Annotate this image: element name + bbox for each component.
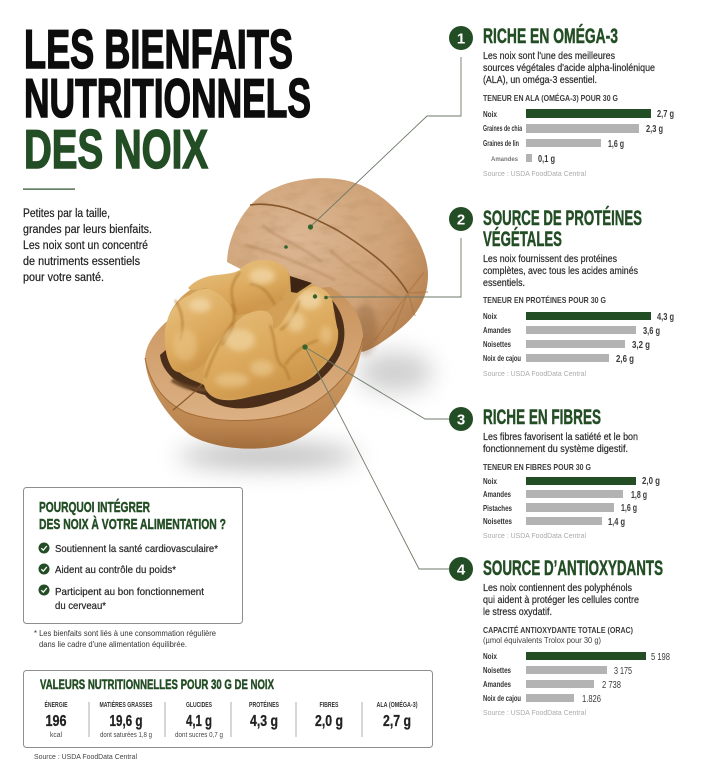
column fibres	[315, 702, 343, 730]
intro text: pour votre santé.	[23, 272, 104, 284]
column proteines: PROTÉINES	[249, 700, 279, 709]
heading 2	[483, 207, 642, 251]
bar chart 2: Noix de cajou	[483, 354, 521, 363]
bar chart 1: Graines de chia	[483, 124, 522, 133]
icon: number 3	[449, 407, 473, 431]
bar chart 2: 2,6 g	[616, 354, 634, 365]
panel: section 3 fibres	[449, 406, 660, 540]
column matieres grasses	[100, 700, 153, 739]
bar chart 3: Noix	[483, 477, 497, 486]
bar chart 1	[483, 93, 674, 165]
heading 2: VÉGÉTALES	[483, 228, 562, 251]
bar chart 2: Amandes	[483, 326, 511, 335]
text block 3: fonctionnement du système digestif.	[483, 444, 628, 455]
title: LES BIENFAITS	[24, 18, 293, 80]
bar chart 2: 3,2 g	[632, 340, 650, 351]
intro text: Les noix sont un concentré	[23, 240, 148, 252]
bar chart 3: TENEUR EN FIBRES POUR 30 G	[483, 462, 591, 472]
bar chart 3: 1,4 g	[608, 517, 625, 528]
bar chart 4: (µmol équivalents Trolox pour 30 g)	[483, 635, 601, 645]
panel: valeurs nutritionnelles	[24, 670, 432, 748]
icon: number 2	[449, 207, 473, 231]
panel: pourquoi integrer	[24, 488, 242, 624]
back walnut	[227, 178, 428, 352]
bar chart 4: 5 198	[651, 652, 670, 663]
bar chart 1: Graines de lin	[483, 139, 519, 148]
nutrition heading: VALEURS NUTRITIONNELLES POUR 30 G DE NOIX	[40, 677, 274, 692]
text block 1: (ALA), un oméga-3 essentiel.	[483, 75, 597, 86]
text block 2: essentiels.	[483, 278, 525, 289]
column matieres grasses: MATIÈRES GRASSES	[100, 700, 153, 709]
bar chart 4: 1.826	[582, 694, 601, 705]
column glucides: GLUCIDES	[186, 702, 212, 709]
icon: number 3: 3	[457, 412, 465, 428]
source 2: Source : USDA FoodData Central	[483, 369, 586, 378]
heading 1: RICHE EN OMÉGA-3	[483, 25, 618, 48]
column proteines	[249, 700, 279, 730]
illustration: walnuts	[145, 178, 433, 468]
bar chart 1: Noix	[483, 110, 497, 119]
column ala	[376, 700, 418, 730]
text block 1	[483, 51, 655, 86]
title	[24, 18, 311, 180]
icon: number 2: 2	[457, 212, 465, 228]
footnote: dans lie cadre d'une alimentation équilibrée.	[39, 640, 187, 649]
panel: section 1 omega-3	[449, 25, 674, 178]
column matieres grasses: dont saturées 1,8 g	[100, 732, 152, 739]
bar chart 1: 0,1 g	[538, 154, 555, 165]
bar chart 3	[483, 462, 660, 528]
column ala: ALA (OMÉGA-3)	[376, 700, 418, 709]
text block 1: Les noix sont l'une des meilleures	[483, 51, 615, 62]
panel: section 2 proteines	[449, 207, 674, 378]
text block 1: sources végétales d'acide alpha-linolénique	[483, 63, 655, 74]
bar chart 4: Noisettes	[483, 666, 511, 675]
source 4: Source : USDA FoodData Central	[483, 708, 586, 717]
column proteines: 4,3 g	[250, 713, 278, 730]
column fibres: FIBRES	[320, 702, 339, 709]
bar chart 1: 2,3 g	[646, 124, 663, 135]
text block 4: le stress oxydatif.	[483, 607, 552, 618]
bar chart 4	[483, 625, 670, 705]
icon: number 4	[449, 557, 473, 581]
bar chart 3: Pistaches	[483, 504, 512, 513]
bar chart 2: Noisettes	[483, 340, 511, 349]
checklist: du cerveau*	[55, 600, 106, 612]
text block 4	[483, 583, 639, 618]
checklist: Participent au bon fonctionnement	[55, 586, 204, 598]
source nutrition: Source : USDA FoodData Central	[34, 752, 137, 761]
bar chart 3: Noisettes	[483, 517, 512, 526]
text block 2: Les noix fournissent des protéines	[483, 254, 617, 265]
bar chart 4: Noix	[483, 652, 497, 661]
bar chart 1: 1,6 g	[608, 139, 624, 150]
checklist: Soutiennent la santé cardiovasculaire*	[55, 543, 218, 555]
panel heading: DES NOIX À VOTRE ALIMENTATION ?	[39, 516, 226, 533]
intro text: grandes par leurs bienfaits.	[23, 224, 152, 236]
column energie: ÉNERGIE	[44, 700, 68, 709]
front walnut shell	[145, 287, 377, 449]
icon: number 4: 4	[457, 562, 466, 578]
bar chart 2: 3,6 g	[643, 326, 660, 337]
footnote: * Les bienfaits sont liés à une consommation régulière	[34, 629, 217, 638]
intro text	[23, 208, 152, 284]
text block 2	[483, 254, 638, 289]
text block 4: qui aident à protéger les cellules contre	[483, 595, 639, 606]
bar chart 2: 4,3 g	[657, 312, 674, 323]
text block 3: Les fibres favorisent la satiété et le bon	[483, 432, 638, 443]
icon: number 1	[449, 26, 473, 50]
column glucides: dont sucres 0,7 g	[175, 732, 223, 739]
column matieres grasses: 19,6 g	[110, 713, 142, 730]
text block 3	[483, 432, 638, 455]
bar chart 2	[483, 295, 674, 365]
bar chart 3: 2,0 g	[642, 476, 660, 487]
title: NUTRITIONNELS	[24, 67, 311, 129]
walnut kernel	[165, 260, 338, 400]
intro text: Petites par la taille,	[23, 208, 110, 220]
checklist	[38, 542, 218, 612]
bar chart 1: Amandes	[491, 157, 519, 163]
connector lines	[305, 57, 461, 569]
heading 3: RICHE EN FIBRES	[483, 406, 601, 429]
bar chart 1: 2,7 g	[657, 109, 674, 120]
bar chart 4: CAPACITÉ ANTIOXYDANTE TOTALE (ORAC)	[483, 625, 633, 635]
column fibres: 2,0 g	[315, 713, 343, 730]
connector dots	[284, 224, 328, 350]
column glucides: 4,1 g	[186, 713, 212, 730]
bar chart 3: 1,6 g	[621, 503, 637, 514]
bar chart 2: TENEUR EN PROTÉINES POUR 30 G	[483, 295, 606, 305]
text block 4: Les noix contiennent des polyphénols	[483, 583, 632, 594]
intro text: de nutriments essentiels	[23, 256, 140, 268]
column glucides	[175, 702, 223, 739]
bar chart 4: Amandes	[483, 680, 511, 689]
title: DES NOIX	[24, 118, 208, 180]
column energie: kcal	[50, 732, 62, 739]
column energie	[44, 700, 68, 739]
icon: number 1: 1	[457, 30, 465, 48]
source 3: Source : USDA FoodData Central	[483, 531, 586, 540]
bar chart 1: TENEUR EN ALA (OMÉGA-3) POUR 30 G	[483, 93, 618, 103]
column energie: 196	[46, 713, 67, 730]
bar chart 3: 1,8 g	[631, 490, 647, 501]
panel heading	[39, 499, 226, 533]
checklist: Aident au contrôle du poids*	[55, 564, 176, 576]
bar chart 2: Noix	[483, 312, 497, 321]
source 1: Source : USDA FoodData Central	[483, 169, 586, 178]
bar chart 3: Amandes	[483, 490, 511, 499]
bar chart 4: 3 175	[614, 666, 632, 677]
column ala: 2,7 g	[383, 713, 411, 730]
bar chart 4: Noix de cajou	[483, 694, 521, 703]
text block 2: complètes, avec tous les acides aminés	[483, 266, 638, 277]
bar chart 4: 2 738	[602, 680, 621, 691]
panel: section 4 antioxydants	[449, 557, 670, 717]
footnote	[34, 629, 217, 649]
panel heading: POURQUOI INTÉGRER	[39, 499, 150, 516]
